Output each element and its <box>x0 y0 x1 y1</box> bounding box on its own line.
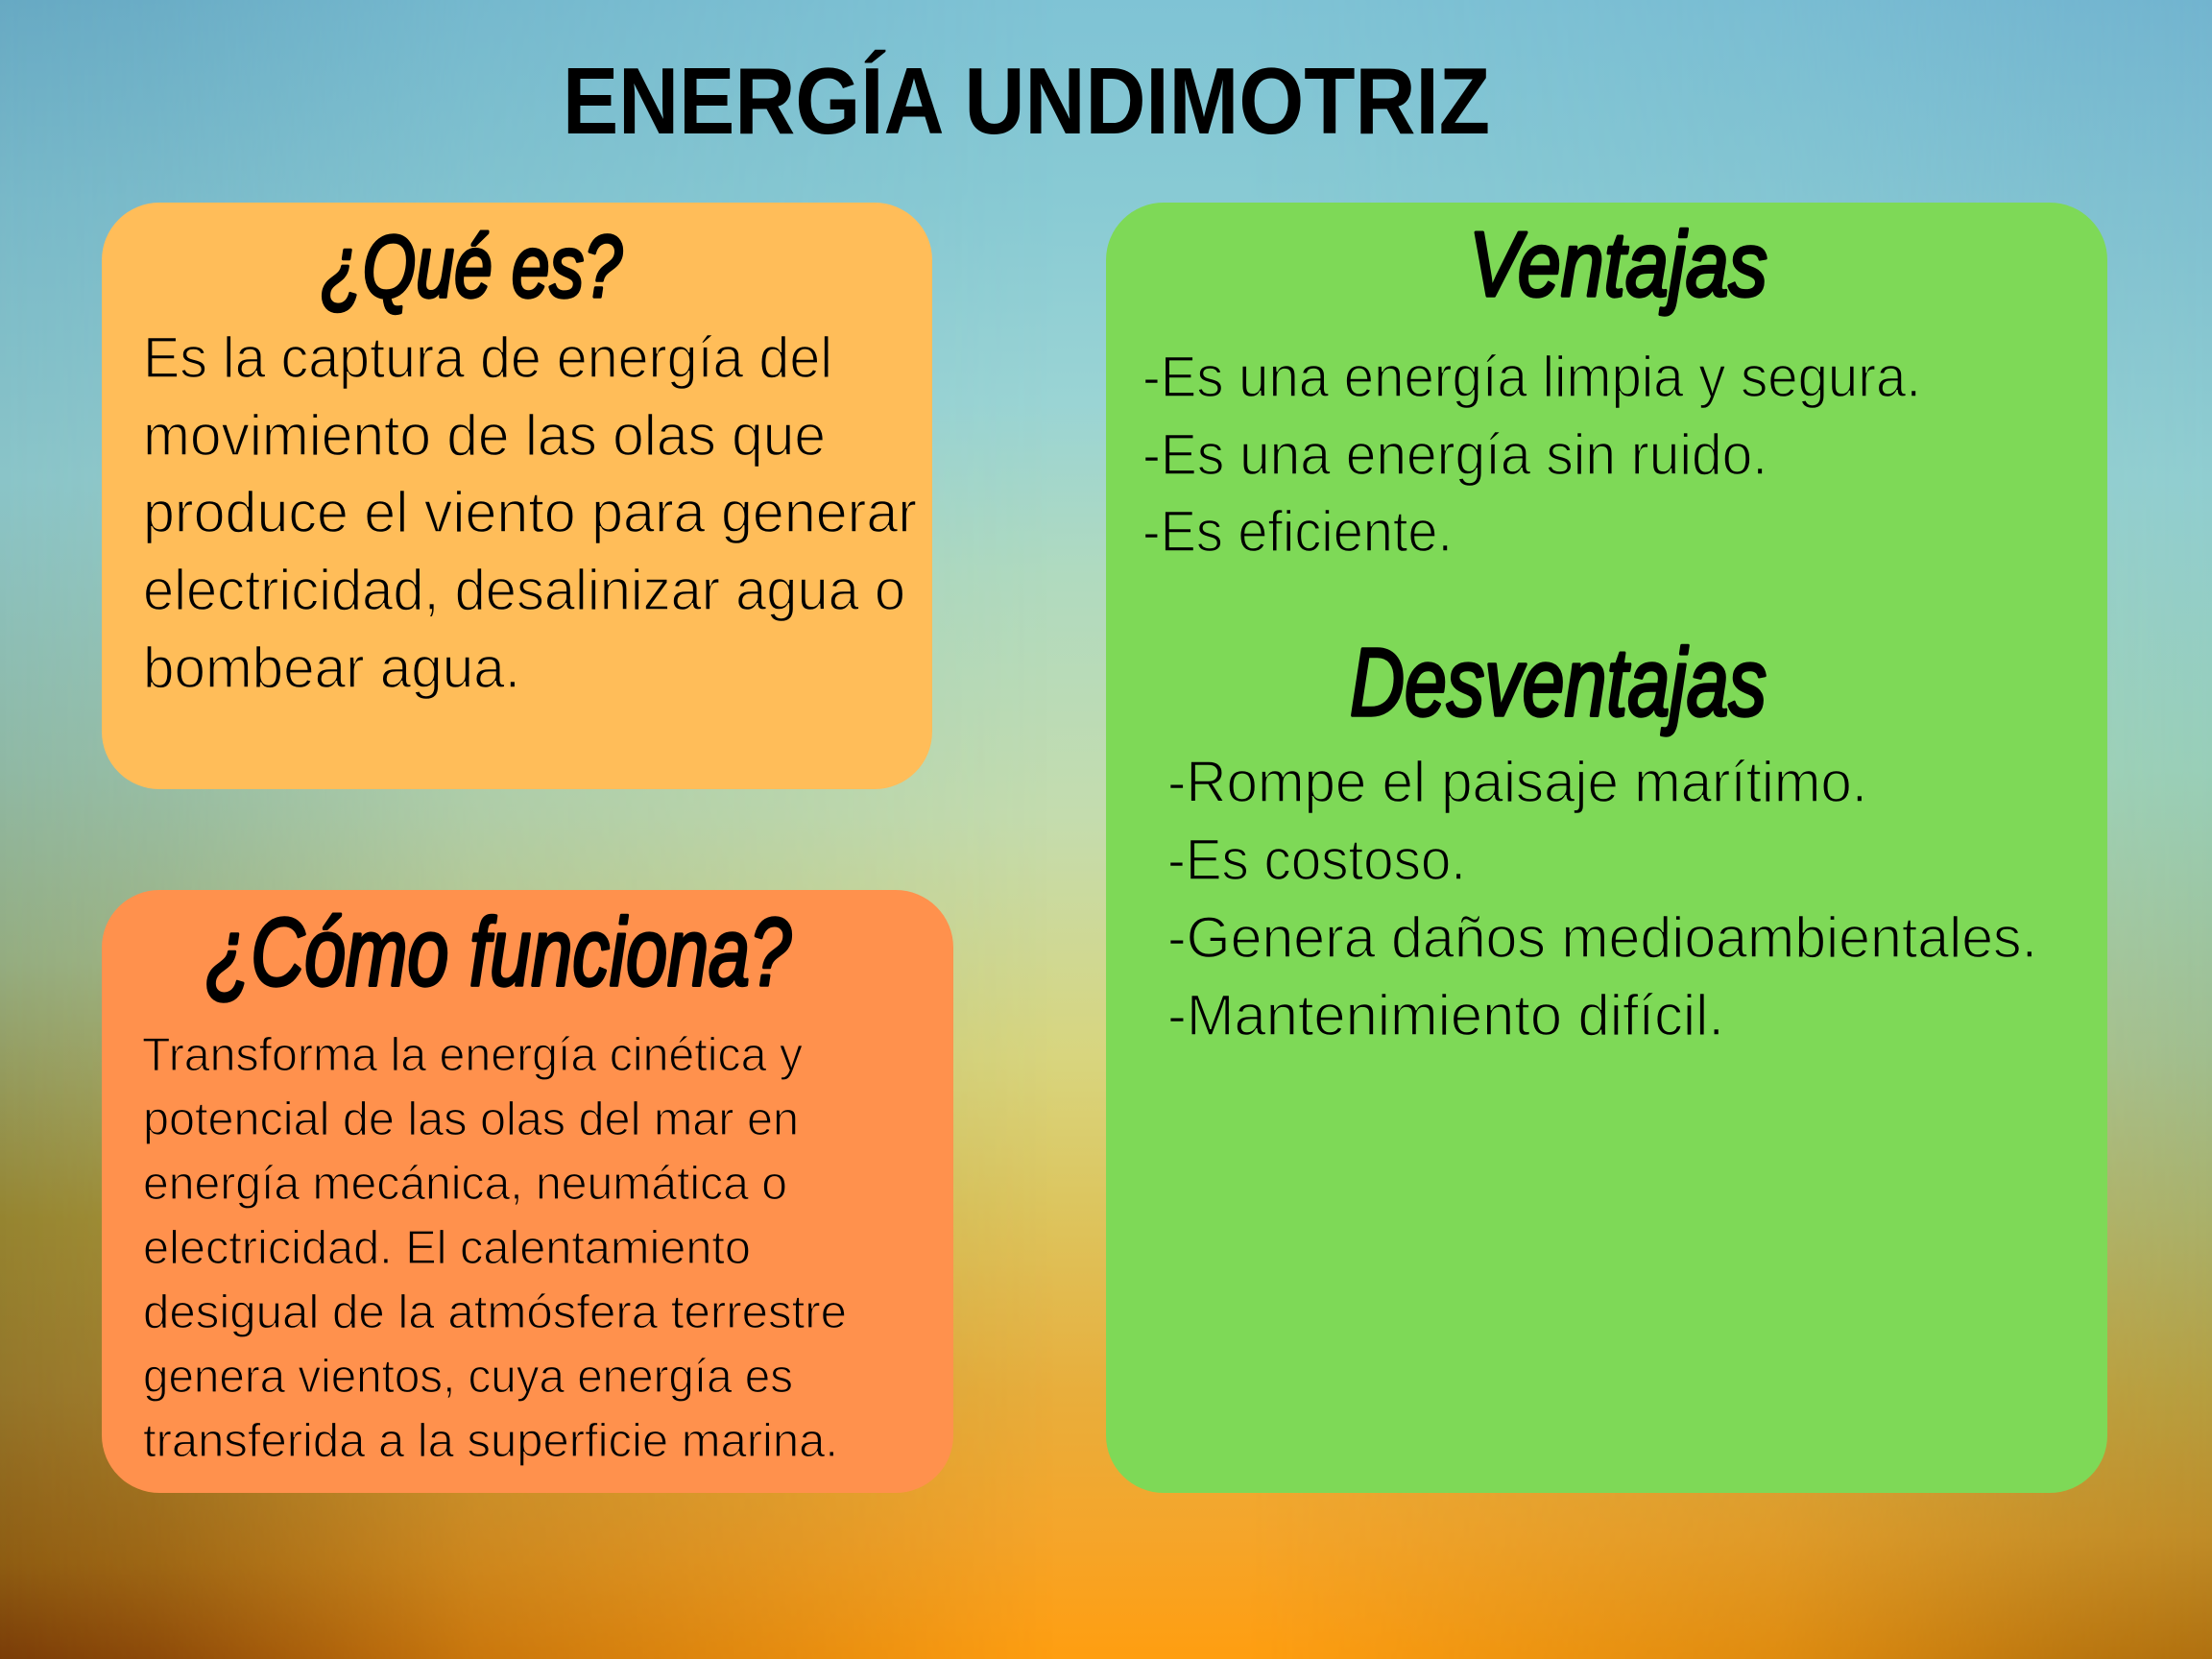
list: desventajas <box>1167 750 2037 1047</box>
text block: explanation: desigual de la atmósfera terrestre <box>143 1286 847 1338</box>
list: desventajas: -Es costoso. <box>1167 828 1466 892</box>
heading: ventajas: Ventajas <box>1469 213 1767 316</box>
text block: explanation: Transforma la energía cinética y <box>142 1029 803 1081</box>
text block: definition: Es la captura de energía del <box>143 325 832 390</box>
text block: explanation: transferida a la superficie marina. <box>143 1415 838 1467</box>
text block: explanation <box>142 1029 847 1467</box>
panel: qué es <box>102 203 932 789</box>
list: desventajas: -Mantenimiento difícil. <box>1167 983 1724 1047</box>
panel: cómo funciona <box>102 890 953 1493</box>
title: ENERGÍA UNDIMOTRIZ <box>563 48 1490 154</box>
text block: explanation: potencial de las olas del mar en <box>143 1094 799 1145</box>
text block: explanation: energía mecánica, neumática o <box>143 1158 787 1210</box>
text block: definition: produce el viento para generar <box>143 480 917 544</box>
list: ventajas: -Es eficiente. <box>1142 499 1453 564</box>
list: desventajas: -Rompe el paisaje marítimo. <box>1167 750 1867 814</box>
text block: definition: movimiento de las olas que <box>143 403 826 468</box>
text block: explanation: electricidad. El calentamiento <box>143 1222 751 1274</box>
text block: definition: bombear agua. <box>143 636 520 700</box>
heading: qué es: ¿Qué es? <box>321 218 622 316</box>
list: ventajas: -Es una energía sin ruido. <box>1142 422 1767 487</box>
list: desventajas: -Genera daños medioambientales. <box>1167 905 2037 970</box>
heading: cómo funciona: ¿Cómo funciona? <box>205 899 791 1006</box>
heading: desventajas: Desventajas <box>1350 629 1767 736</box>
panel: ventajas y desventajas <box>1106 203 2107 1493</box>
list: ventajas: -Es una energía limpia y segura. <box>1142 345 1921 409</box>
text block: explanation: genera vientos, cuya energía es <box>143 1351 793 1403</box>
text block: definition: electricidad, desalinizar agua o <box>143 558 905 622</box>
text block: definition <box>143 325 917 700</box>
list: ventajas <box>1142 345 1921 564</box>
